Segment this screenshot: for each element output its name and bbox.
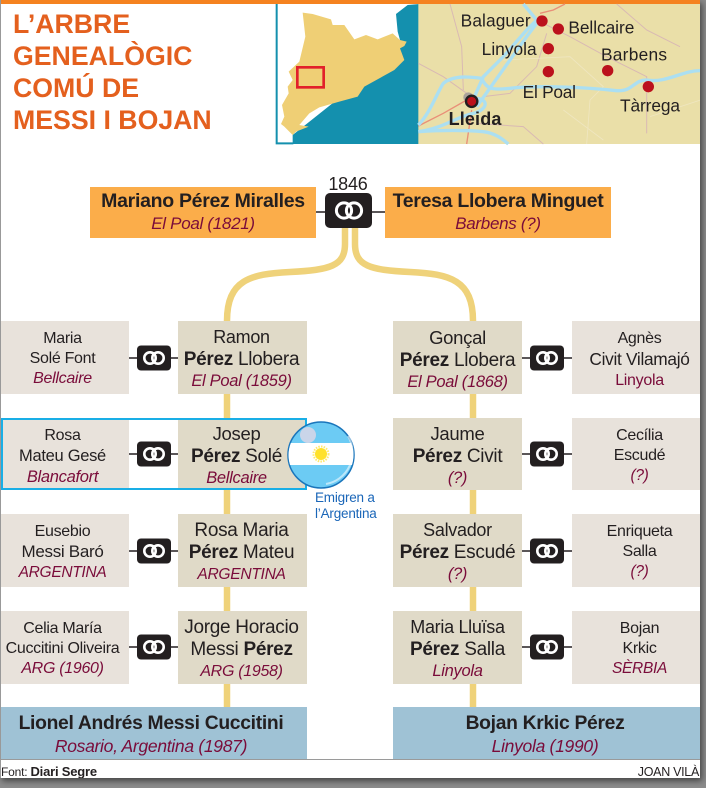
spouse: Maria bbox=[1, 321, 129, 394]
person: Ramon: Pérez Llobera bbox=[184, 348, 299, 370]
person: Gonçal: Gonçal bbox=[429, 327, 486, 348]
spouse: Agnès: Civit Vilamajó bbox=[589, 349, 690, 369]
spouse: Enriqueta bbox=[572, 514, 701, 587]
spouse: Cecília bbox=[572, 418, 701, 490]
icon: Argentine flag badge bbox=[287, 421, 355, 489]
title: GENEALÒGIC bbox=[13, 41, 192, 71]
spouse: Eusebio: Eusebio bbox=[35, 523, 90, 540]
person: Jaume: Jaume bbox=[430, 423, 485, 444]
person: Jorge Horacio: Messi Pérez bbox=[190, 638, 293, 660]
spouse: Rosa: Rosa bbox=[44, 427, 81, 444]
spouse: Cecília: Cecília bbox=[616, 427, 663, 444]
person: Jaume bbox=[393, 418, 522, 490]
Lleida area map: Tàrrega bbox=[620, 96, 680, 116]
highlight frame around emigrating couple bbox=[1, 418, 307, 490]
spouse: Bojan Krkic: Bojan bbox=[620, 620, 659, 637]
Lleida area map bbox=[418, 4, 701, 144]
icon: wedding rings, founders bbox=[325, 193, 372, 228]
title bbox=[13, 9, 212, 135]
person: Jaume: (?) bbox=[448, 469, 467, 487]
result: Messi: Rosario, Argentina (1987) bbox=[55, 736, 247, 756]
spouse: Agnès: Agnès bbox=[618, 330, 661, 347]
person: Maria Lluïsa: Maria Lluïsa bbox=[410, 617, 505, 637]
spouse: Celia bbox=[1, 611, 129, 684]
Lleida area map: Balaguer bbox=[461, 11, 531, 31]
title: L’ARBRE bbox=[13, 9, 130, 39]
spouse: Enriqueta: Salla bbox=[622, 543, 657, 560]
map: Catalonia locator and Lleida area bbox=[276, 2, 700, 146]
person: Salvador bbox=[393, 514, 522, 587]
person: Jorge Horacio: Jorge Horacio bbox=[184, 617, 299, 638]
icons: wedding rings, left and right columns bbox=[137, 346, 564, 660]
person: Salvador: Salvador bbox=[423, 520, 492, 540]
title: MESSI I BOJAN bbox=[13, 105, 212, 135]
ancestor: Teresa: Teresa Llobera Minguet bbox=[393, 190, 603, 212]
left spouses column bbox=[1, 321, 129, 684]
caption: emigration: Emigren a bbox=[315, 490, 375, 505]
spouse: Bojan Krkic bbox=[572, 611, 701, 684]
person: Gonçal bbox=[393, 321, 522, 394]
spouse: Cecília: (?) bbox=[630, 467, 649, 484]
spouse: Celia: Cuccitini Oliveira bbox=[6, 640, 119, 657]
Messi line column bbox=[178, 321, 307, 684]
top orange bar bbox=[1, 0, 701, 4]
person: Rosa Maria: Pérez Mateu bbox=[189, 542, 294, 562]
person: Rosa Maria bbox=[178, 514, 307, 587]
spouse: Rosa: Blancafort bbox=[27, 468, 98, 486]
spouse: Maria: Bellcaire bbox=[33, 370, 92, 387]
person: Josep: Josep bbox=[213, 423, 260, 444]
spouse: Rosa bbox=[1, 418, 129, 490]
result: Bojan: Bojan Krkic Pérez bbox=[466, 713, 624, 734]
spouse: Eusebio: Messi Baró bbox=[21, 542, 104, 561]
person: Rosa Maria: ARGENTINA bbox=[197, 566, 286, 583]
person: Gonçal: El Poal (1868) bbox=[407, 373, 508, 391]
spouse: Maria: Maria bbox=[43, 330, 82, 347]
person: Salvador: (?) bbox=[448, 565, 467, 583]
spouse: Bojan Krkic: Krkic bbox=[622, 640, 657, 657]
result: Bojan: Linyola (1990) bbox=[492, 736, 598, 756]
spouse: Enriqueta: (?) bbox=[630, 563, 649, 580]
spouse: Eusebio bbox=[1, 514, 129, 587]
ancestor: Mariano: El Poal (1821) bbox=[151, 214, 255, 233]
Lleida area map: Linyola bbox=[482, 39, 537, 59]
person: Maria Lluïsa bbox=[393, 611, 522, 684]
result: Bojan bbox=[393, 707, 700, 759]
person: Ramon: El Poal (1859) bbox=[191, 372, 292, 390]
title: COMÚ DE bbox=[13, 73, 139, 103]
Lleida area map: Barbens bbox=[601, 44, 667, 64]
footer rule bbox=[1, 759, 701, 760]
ancestor: Mariano: Mariano Pérez Miralles bbox=[101, 190, 305, 212]
locator map of Catalonia bbox=[276, 4, 419, 144]
person: Maria Lluïsa: Pérez Salla bbox=[410, 638, 505, 660]
spouse: Celia: Celia María bbox=[23, 620, 102, 637]
person: Ramon bbox=[178, 321, 307, 394]
person: Gonçal: Pérez Llobera bbox=[400, 350, 515, 370]
result: Messi: Lionel Andrés Messi Cuccitini bbox=[19, 713, 283, 734]
person: Rosa Maria: Rosa Maria bbox=[194, 520, 289, 541]
ancestor: Teresa: Barbens (?) bbox=[455, 214, 541, 233]
Lleida area map: El Poal bbox=[523, 82, 576, 102]
result: Messi bbox=[1, 707, 307, 759]
caption: emigration bbox=[315, 490, 377, 521]
person: Ramon: Ramon bbox=[213, 327, 270, 347]
person: Maria Lluïsa: Linyola bbox=[432, 662, 483, 680]
spouse: Eusebio: ARGENTINA bbox=[19, 564, 106, 581]
spouse: Celia: ARG (1960) bbox=[21, 660, 104, 677]
spouse: Rosa: Mateu Gesé bbox=[19, 447, 106, 465]
spouse: Agnès bbox=[572, 321, 701, 394]
Lleida area map: Lleida bbox=[449, 109, 502, 129]
spouse: Cecília: Escudé bbox=[614, 447, 665, 464]
person: Josep bbox=[178, 418, 307, 490]
Lleida area map: Bellcaire bbox=[568, 17, 634, 37]
person: Josep: Bellcaire bbox=[206, 469, 267, 487]
person: Jorge Horacio: ARG (1958) bbox=[200, 663, 283, 680]
year of marriage: 1846 bbox=[328, 174, 368, 194]
spouse: Bojan Krkic: SÈRBIA bbox=[612, 660, 667, 677]
ancestor: Mariano bbox=[90, 187, 316, 238]
person: Jaume: Pérez Civit bbox=[413, 446, 502, 466]
spouse: Maria: Solé Font bbox=[30, 350, 95, 367]
spouse: Agnès: Linyola bbox=[615, 372, 664, 389]
spouse: Enriqueta: Enriqueta bbox=[607, 523, 672, 540]
person: Jorge Horacio bbox=[178, 611, 307, 684]
ancestor: Teresa bbox=[385, 187, 611, 238]
Bojan line column bbox=[393, 321, 522, 684]
person: Josep: Pérez Solé bbox=[191, 446, 282, 466]
person: Salvador: Pérez Escudé bbox=[400, 542, 515, 562]
caption: emigration: l’Argentina bbox=[315, 506, 377, 520]
